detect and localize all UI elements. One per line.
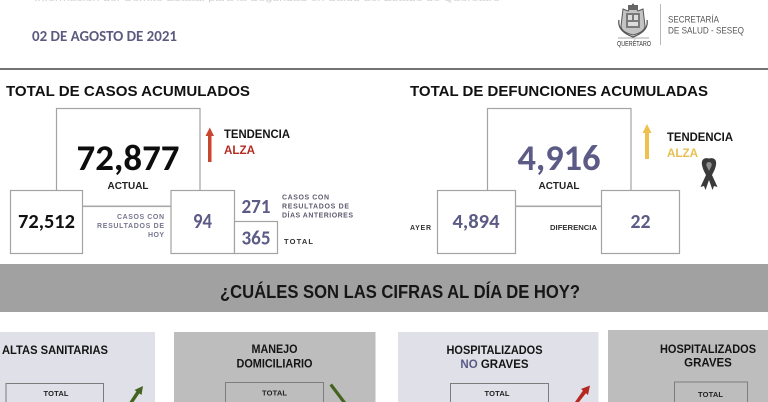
figure: earlier results: 271	[242, 195, 270, 219]
big box: current deaths: ACTUAL	[538, 181, 580, 192]
panel: total cases	[6, 83, 353, 254]
big box: current deaths: 4,916	[518, 136, 600, 180]
header	[32, 0, 744, 48]
label: earlier results	[282, 194, 353, 220]
panel title: DOMICILIARIO	[236, 358, 313, 370]
total box: TOTAL	[698, 390, 723, 399]
label: earlier results: RESULTADOS DE	[282, 204, 349, 210]
total box: TOTAL	[484, 389, 510, 398]
box: yesterday	[438, 190, 516, 254]
box: previous cases	[10, 190, 82, 254]
icon: Querétaro coat of arms	[617, 4, 651, 48]
big box: current cases: 72,877	[76, 136, 180, 180]
box: previous cases: 72,512	[18, 210, 75, 234]
banner: today's figures	[0, 264, 768, 312]
label: total: TOTAL	[284, 237, 313, 246]
panel title: NO GRAVES	[460, 359, 529, 371]
trend label: TENDENCIA	[224, 129, 290, 141]
label: cases with results today	[97, 214, 164, 239]
arrow: green down	[330, 384, 346, 402]
trend label: ALZA	[224, 145, 255, 157]
trend label: TENDENCIA	[667, 132, 733, 144]
box: yesterday: 4,894	[452, 210, 500, 234]
panel title: HOSPITALIZADOS	[446, 345, 543, 357]
arrow: red up	[575, 386, 590, 402]
health ministry name: DE SALUD - SESEQ	[668, 26, 744, 36]
panel: severe hospitalized	[608, 330, 768, 402]
label: difference: DIFERENCIA	[550, 225, 597, 232]
box: difference: 22	[630, 210, 650, 234]
big box: current deaths	[488, 108, 631, 206]
panel: sanitary discharges	[0, 332, 155, 402]
label: yesterday: AYER	[410, 225, 431, 232]
heading: total cases: TOTAL DE CASOS ACUMULADOS	[6, 83, 250, 100]
connector line	[515, 206, 602, 207]
total box	[674, 382, 748, 402]
box: today's results	[171, 190, 234, 254]
label: earlier results: DÍAS ANTERIORES	[282, 210, 353, 220]
label: cases with results today: RESULTADOS DE	[97, 223, 164, 230]
trend label: ALZA	[667, 148, 698, 160]
banner: today's figures: ¿CUÁLES SON LAS CIFRAS AL DÍA DE HOY?	[220, 281, 580, 302]
icon: mourning ribbon	[700, 158, 718, 190]
connector line	[82, 206, 172, 207]
logo divider	[660, 4, 661, 45]
panel: home care	[174, 332, 376, 402]
logo caption: QUERÉTARO	[617, 39, 651, 48]
big box: current cases: ACTUAL	[108, 181, 148, 192]
total box	[450, 384, 548, 402]
box: total new cases	[234, 222, 278, 254]
box: total new cases: 365	[242, 226, 270, 250]
panel title	[236, 344, 313, 370]
panel title	[446, 345, 543, 371]
arrow: rising trend yellow	[642, 124, 652, 159]
panel title: GRAVES	[684, 358, 732, 370]
big box: current cases	[56, 108, 200, 206]
heading: total deaths: TOTAL DE DEFUNCIONES ACUMULADAS	[410, 83, 708, 100]
arrow: green up	[130, 386, 143, 402]
arrow: rising trend red	[206, 128, 214, 162]
total box: TOTAL	[262, 388, 287, 398]
panel title	[660, 344, 756, 370]
box: today's results: 94	[193, 208, 212, 234]
trend label	[224, 129, 290, 157]
panel: total deaths	[410, 83, 733, 254]
panel: non-severe hospitalized	[398, 332, 598, 402]
label: earlier results: CASOS CON	[282, 194, 329, 202]
health ministry name	[668, 14, 744, 36]
total box	[226, 382, 324, 402]
trend label	[667, 132, 733, 160]
panel title: ALTAS SANITARIAS	[2, 345, 108, 357]
header rule	[0, 68, 768, 70]
total box	[6, 384, 104, 402]
total box: TOTAL	[44, 389, 69, 398]
panel title: HOSPITALIZADOS	[660, 344, 756, 356]
panel title: MANEJO	[252, 344, 298, 356]
box: difference	[602, 190, 680, 254]
health ministry name: SECRETARÍA	[668, 14, 720, 26]
date: 02 DE AGOSTO DE 2021	[32, 28, 177, 46]
label: cases with results today: CASOS CON	[117, 214, 164, 221]
label: cases with results today: HOY	[148, 232, 164, 239]
